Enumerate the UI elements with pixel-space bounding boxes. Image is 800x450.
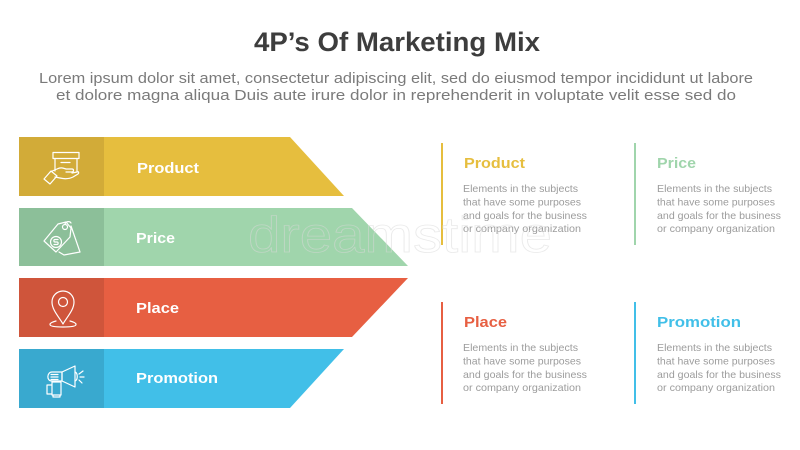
heading: Place: Place [464, 314, 507, 331]
arrow bar: Product [19, 137, 344, 196]
subtitle: et dolore magna aliqua Duis aute irure dolor in reprehenderit in voluptate velit esse sed do [56, 87, 736, 104]
icon: megaphone [47, 366, 84, 397]
text block: Place body: or company organization [463, 382, 581, 394]
text block: Price body [657, 183, 781, 235]
text block: Place body: and goals for the business [463, 369, 587, 381]
subtitle [39, 70, 753, 104]
text block: Promotion body: or company organization [657, 382, 775, 394]
watermark: dreamstime [248, 207, 552, 263]
panel: Place description [441, 302, 587, 404]
text block: Product body: that have some purposes [463, 196, 581, 208]
subtitle: Lorem ipsum dolor sit amet, consectetur adipiscing elit, sed do eiusmod tempor incididunt ut labore [39, 70, 753, 87]
text block: Product body: Elements in the subjects [463, 183, 578, 195]
text block: Price body: and goals for the business [657, 210, 781, 222]
text block: Product body: and goals for the business [463, 210, 587, 222]
icon: map pin [50, 291, 76, 327]
heading: Price: Price [657, 155, 696, 172]
panel: Promotion description [634, 302, 781, 404]
text block: Promotion body: that have some purposes [657, 356, 775, 368]
text block: Promotion body: Elements in the subjects [657, 342, 772, 354]
text block: Price body: that have some purposes [657, 196, 775, 208]
icon: box in hand [44, 152, 79, 184]
label: Product: Product [137, 160, 199, 177]
text block: Place body: Elements in the subjects [463, 342, 578, 354]
text block: Place body [463, 342, 587, 394]
arrow bar: Price [19, 208, 408, 266]
panel: Price description [634, 143, 781, 245]
label: Price: Price [136, 230, 175, 247]
icon: price tags [44, 222, 80, 255]
title: 4P’s Of Marketing Mix [254, 27, 540, 57]
text block: Promotion body: and goals for the business [657, 369, 781, 381]
heading: Product: Product [464, 155, 525, 172]
arrow bar: Promotion [19, 349, 344, 408]
text block: Place body: that have some purposes [463, 356, 581, 368]
label: Promotion: Promotion [136, 370, 218, 387]
arrow bar: Place [19, 278, 408, 337]
text block: Price body: Elements in the subjects [657, 183, 772, 195]
panel: Product description [441, 143, 587, 245]
heading: Promotion: Promotion [657, 314, 741, 331]
text block: Price body: or company organization [657, 223, 775, 235]
text block: Product body [463, 183, 587, 235]
text block: Promotion body [657, 342, 781, 394]
text block: Product body: or company organization [463, 223, 581, 235]
label: Place: Place [136, 300, 179, 317]
